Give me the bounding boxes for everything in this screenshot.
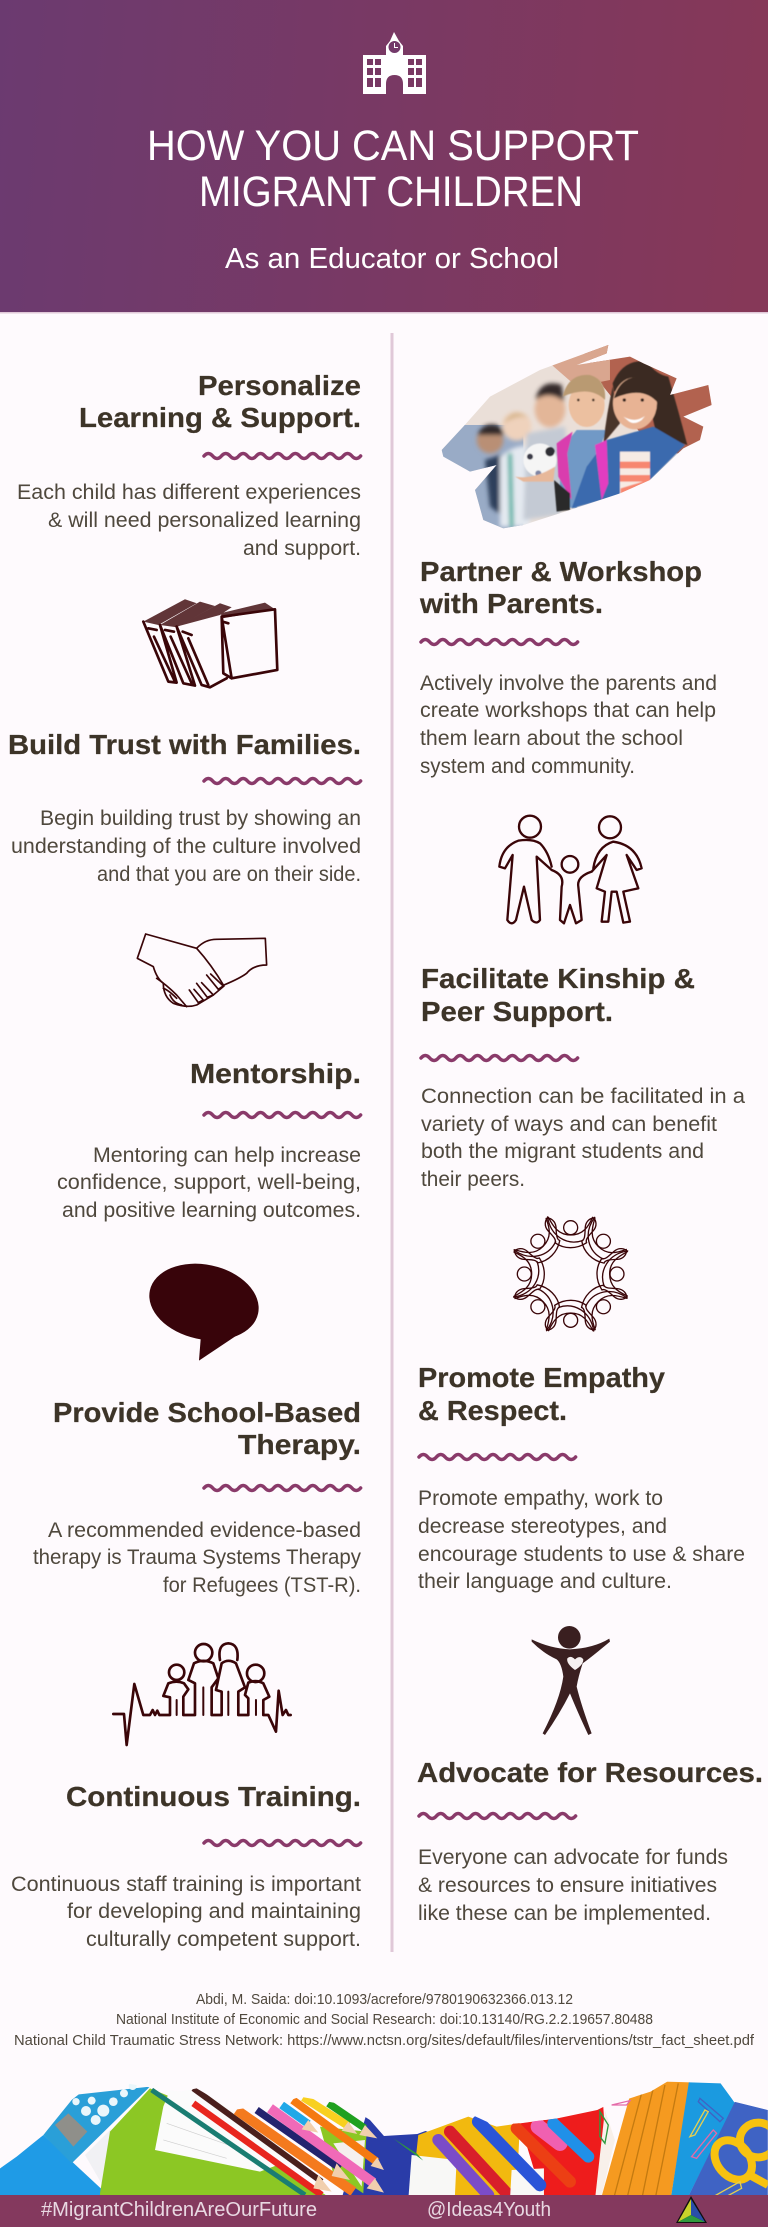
text block: personalize <box>17 481 361 560</box>
citations: National Institute of Economic and Social Research: doi:10.13140/RG.2.2.19657.80488 <box>116 2011 653 2028</box>
image: school supplies collage <box>0 2082 768 2195</box>
text block: partner: Actively involve the parents and <box>420 672 717 695</box>
heading: advocate: Advocate for Resources. <box>417 1757 763 1788</box>
text block: advocate <box>418 1846 728 1925</box>
heading: build trust: Build Trust with Families. <box>8 729 361 760</box>
icon: handshake <box>137 934 267 1007</box>
heading: therapy: Therapy. <box>238 1429 361 1460</box>
panel: partner with parents <box>419 556 717 778</box>
heading: mentorship: Mentorship. <box>190 1058 361 1089</box>
text block: training: for developing and maintaining <box>67 1900 361 1923</box>
heading: partner: with Parents. <box>419 588 603 619</box>
text block: kinship <box>421 1085 745 1191</box>
panel: empathy and respect <box>418 1362 745 1593</box>
text block: partner: system and community. <box>420 755 635 778</box>
header banner <box>0 0 768 314</box>
icon: books <box>143 599 277 687</box>
text block: build trust <box>11 807 361 886</box>
panel: kinship and peer support <box>421 963 745 1191</box>
title: HOW YOU CAN SUPPORT <box>147 122 639 170</box>
heading: empathy <box>418 1362 665 1426</box>
text block: build trust: Begin building trust by showing an <box>40 807 361 830</box>
heading: empathy: & Respect. <box>418 1395 567 1426</box>
text block: training: culturally competent support. <box>86 1928 361 1951</box>
title <box>147 122 639 216</box>
heading: personalize: Learning & Support. <box>79 402 361 433</box>
text block: mentorship: and positive learning outcomes. <box>62 1199 361 1222</box>
text block: mentorship: confidence, support, well-being, <box>57 1171 361 1194</box>
text block: personalize: Each child has different experiences <box>17 481 361 504</box>
text block: partner: create workshops that can help <box>420 699 716 722</box>
text block: kinship: both the migrant students and <box>421 1140 704 1163</box>
text block: mentorship: Mentoring can help increase <box>93 1144 361 1167</box>
photo: group of school children <box>437 340 717 533</box>
text block: advocate: & resources to ensure initiatives <box>418 1874 717 1897</box>
text block: partner: them learn about the school <box>420 727 683 750</box>
heading: therapy: Provide School-Based <box>53 1397 361 1428</box>
text block: personalize: and support. <box>243 537 361 560</box>
panel: school-based therapy <box>33 1397 361 1597</box>
heading: partner <box>419 556 702 619</box>
text block: kinship: Connection can be facilitated in a <box>421 1085 745 1108</box>
footer band <box>0 2195 768 2227</box>
heading: personalize <box>79 370 361 433</box>
citations: Abdi, M. Saida: doi:10.1093/acrefore/9780190632366.013.12 <box>196 1991 573 2008</box>
text block: partner <box>420 672 717 778</box>
heading: partner: Partner & Workshop <box>420 556 702 587</box>
text block: build trust: and that you are on their side. <box>97 863 361 886</box>
text block: personalize: & will need personalized learning <box>48 509 361 532</box>
heading: kinship: Facilitate Kinship & <box>421 963 695 994</box>
icon: school building <box>363 32 426 94</box>
text block: therapy: therapy is Trauma Systems Therapy <box>33 1546 361 1569</box>
citations <box>14 1991 755 2049</box>
handle: @Ideas4Youth <box>427 2199 551 2221</box>
icon: family holding hands <box>499 816 642 923</box>
subtitle: As an Educator or School <box>225 243 559 275</box>
text block: training <box>11 1873 361 1951</box>
text block: therapy: for Refugees (TST-R). <box>163 1574 361 1597</box>
icon: family with heartbeat <box>113 1643 291 1745</box>
panel: mentorship <box>57 1058 361 1222</box>
heading: kinship <box>421 963 695 1027</box>
text block: empathy: decrease stereotypes, and <box>418 1515 667 1538</box>
panel: personalize learning <box>17 370 361 560</box>
text block: advocate: Everyone can advocate for funds <box>418 1846 728 1869</box>
heading: kinship: Peer Support. <box>421 996 613 1027</box>
text block: empathy: encourage students to use & share <box>418 1543 745 1566</box>
text block: kinship: variety of ways and can benefit <box>421 1113 717 1136</box>
panel: continuous training <box>11 1781 361 1951</box>
text block: empathy <box>418 1487 745 1593</box>
text block: training: Continuous staff training is important <box>11 1873 361 1896</box>
text block: mentorship <box>57 1144 361 1222</box>
text block: kinship: their peers. <box>421 1168 525 1191</box>
heading: therapy <box>53 1397 361 1460</box>
hashtag: #MigrantChildrenAreOurFuture <box>41 2199 317 2221</box>
heading: training: Continuous Training. <box>66 1781 361 1812</box>
text block: empathy: their language and culture. <box>418 1570 672 1593</box>
heading: empathy: Promote Empathy <box>418 1362 665 1393</box>
icon: person with heart <box>532 1626 610 1735</box>
title: MIGRANT CHILDREN <box>199 168 583 216</box>
text block: advocate: like these can be implemented. <box>418 1902 711 1925</box>
logo <box>676 2196 707 2223</box>
icon: circle of people <box>491 1194 651 1354</box>
icon: speech bubble <box>142 1254 266 1361</box>
panel: advocate for resources <box>417 1757 763 1925</box>
text block: therapy: A recommended evidence-based <box>48 1519 361 1542</box>
text block: therapy <box>33 1519 361 1597</box>
citations: National Child Traumatic Stress Network: https://www.nctsn.org/sites/default/files/interventions/tstr_fact_sheet.pdf <box>14 2032 755 2049</box>
text block: build trust: understanding of the culture involved <box>11 835 361 858</box>
panel: build trust <box>8 729 361 886</box>
heading: personalize: Personalize <box>198 370 361 401</box>
text block: empathy: Promote empathy, work to <box>418 1487 663 1510</box>
